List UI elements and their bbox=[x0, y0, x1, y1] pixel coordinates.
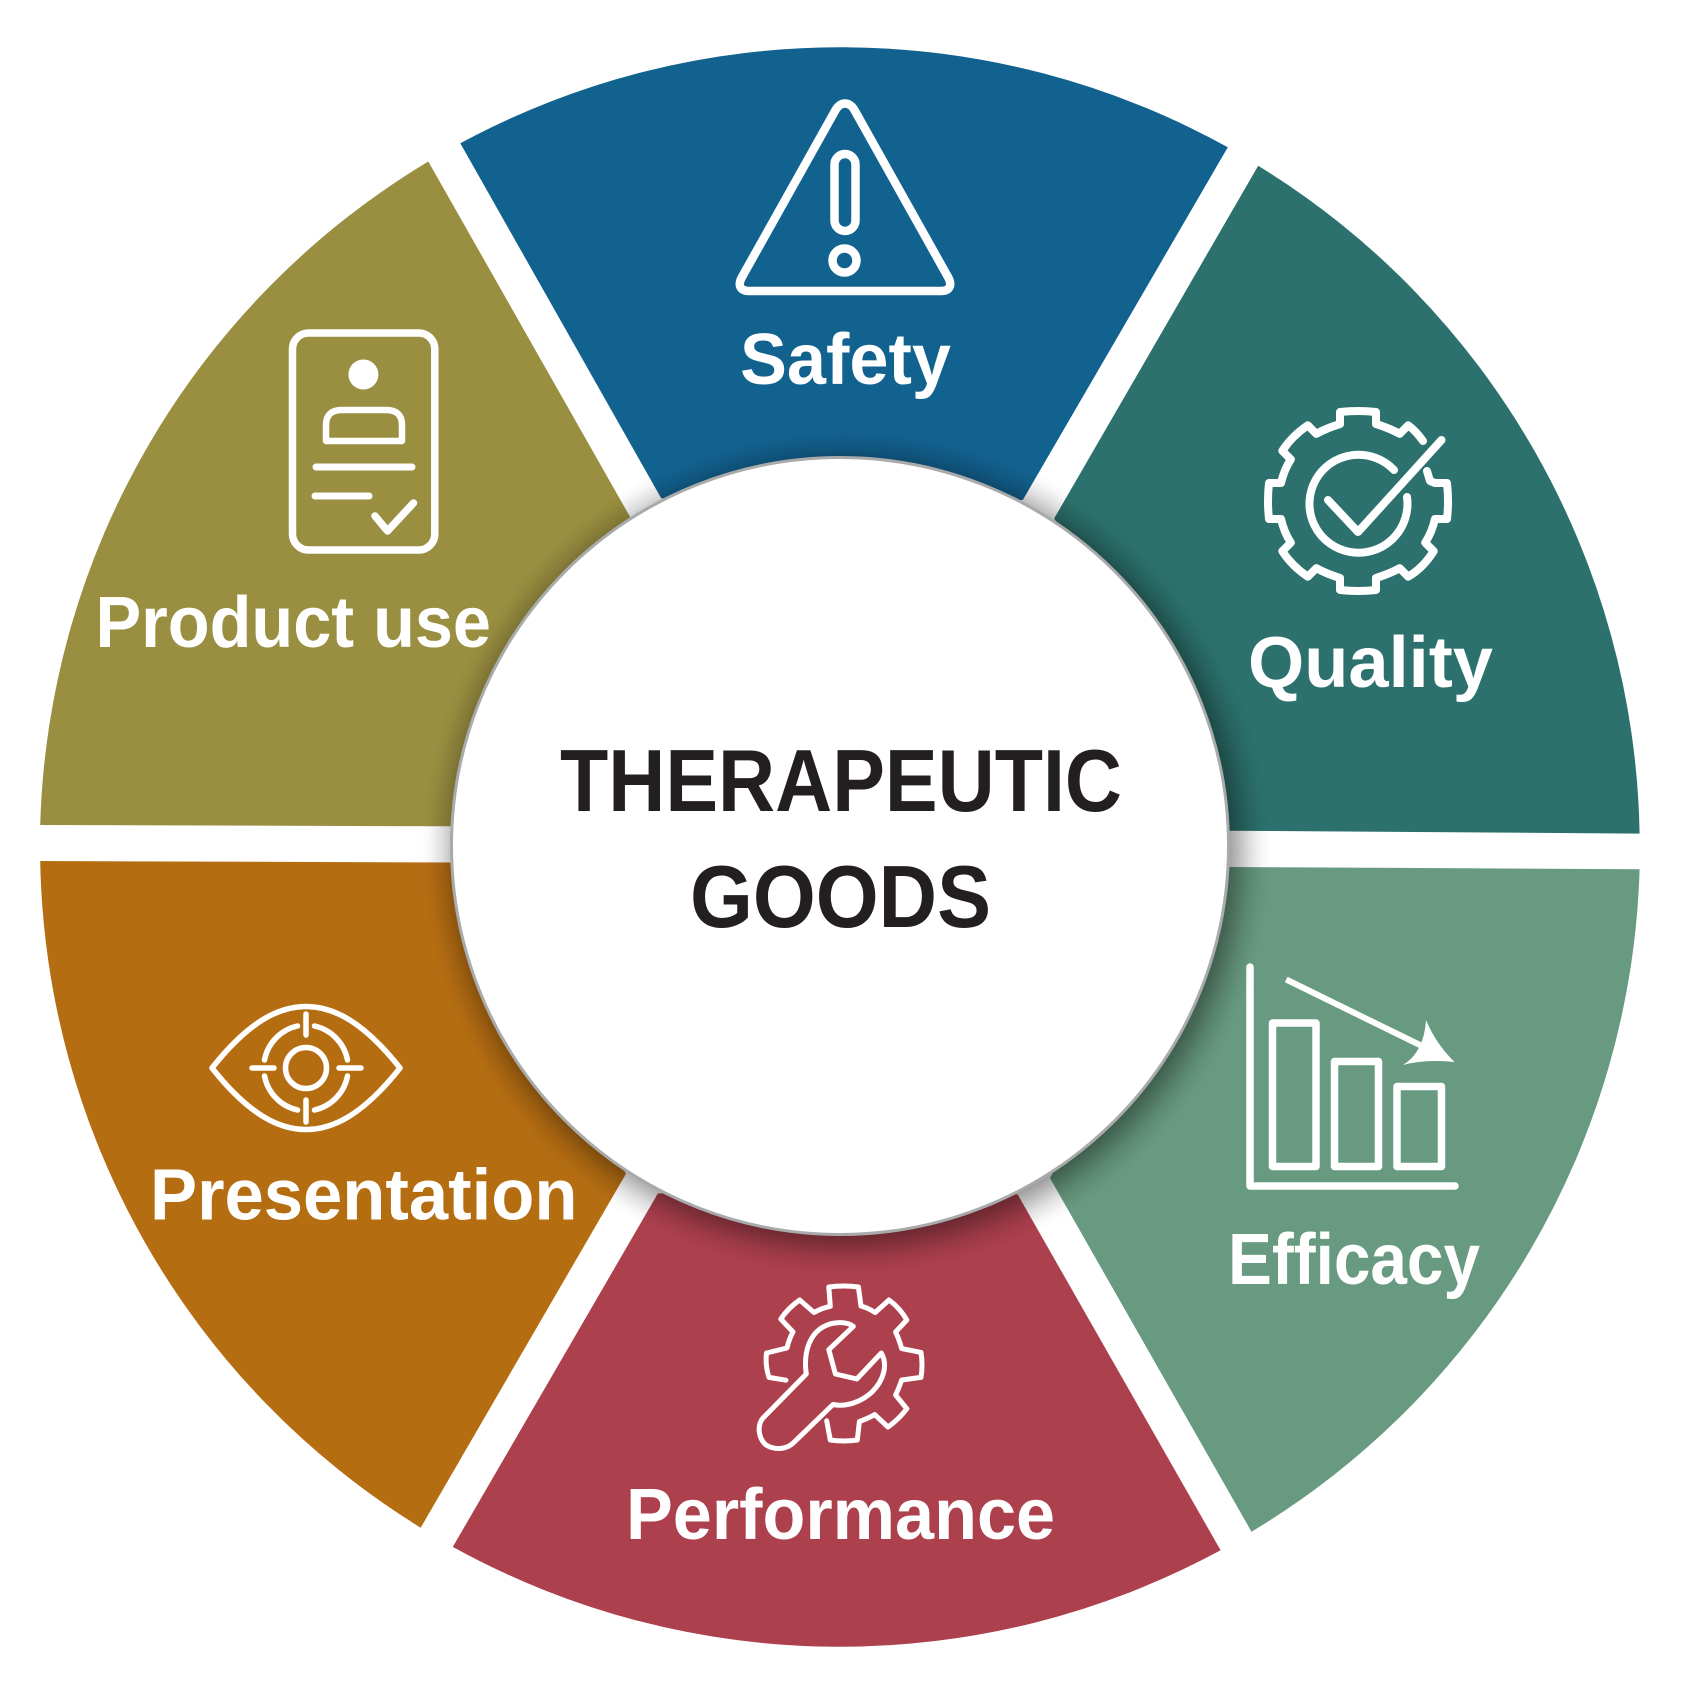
icon: gear with wrench bbox=[759, 1286, 922, 1449]
label: Product use: Product use bbox=[96, 583, 491, 663]
icon: declining bar chart bbox=[1250, 967, 1455, 1186]
centre circle bbox=[452, 458, 1228, 1234]
label: Quality: Quality bbox=[1248, 623, 1493, 703]
icon: eye with target bbox=[212, 1006, 400, 1130]
centre circle shadow bbox=[421, 427, 1271, 1277]
label: Efficacy: Efficacy bbox=[1228, 1220, 1480, 1300]
heading: THERAPEUTIC: THERAPEUTIC bbox=[560, 731, 1122, 830]
icon: gear with check mark bbox=[1268, 411, 1448, 591]
panel: product use bbox=[40, 162, 630, 826]
panel: quality bbox=[1054, 166, 1640, 834]
panel: performance bbox=[453, 1193, 1221, 1647]
label: Performance: Performance bbox=[626, 1475, 1055, 1555]
panel: efficacy bbox=[1050, 867, 1640, 1532]
label: Presentation: Presentation bbox=[150, 1156, 578, 1236]
icon: warning triangle bbox=[740, 104, 950, 291]
icon: document with person and check bbox=[292, 333, 435, 550]
heading: GOODS: GOODS bbox=[690, 847, 991, 946]
label: Safety: Safety bbox=[740, 320, 951, 400]
panel: safety bbox=[460, 47, 1228, 500]
panel: presentation bbox=[40, 861, 626, 1528]
